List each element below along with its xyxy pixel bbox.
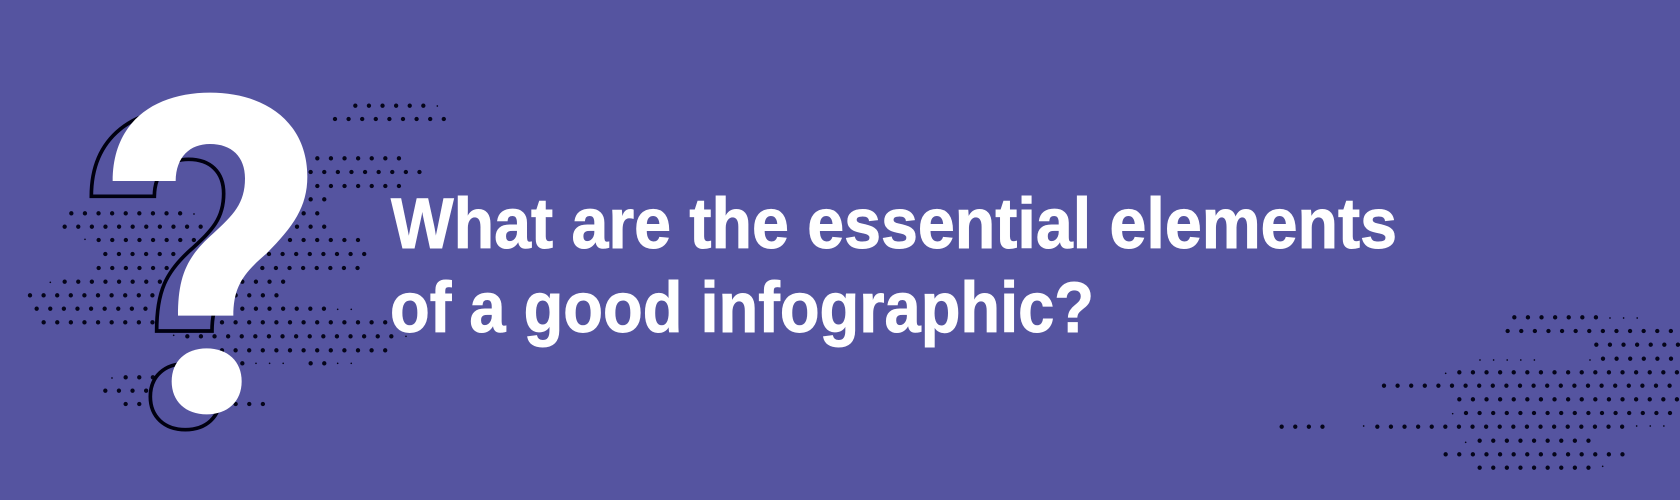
title xyxy=(390,185,1397,348)
title: of a good infographic? xyxy=(390,269,1094,348)
title: What are the essential elements xyxy=(391,185,1397,264)
icon: question mark black outline xyxy=(91,108,286,430)
halftone dots: left cloud xyxy=(30,106,447,404)
halftone dots: right cloud xyxy=(1282,317,1680,468)
icon: question mark xyxy=(91,93,307,430)
icon: question mark white fill xyxy=(113,93,307,414)
